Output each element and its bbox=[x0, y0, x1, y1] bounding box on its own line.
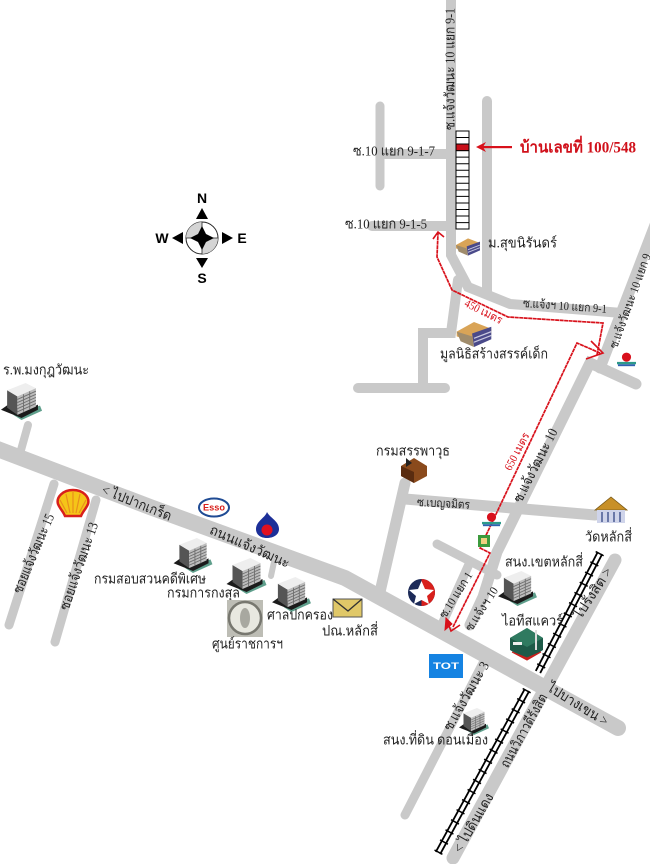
arrow to house bbox=[476, 142, 512, 152]
road label: Chaeng Watthana road: ถนนแจ้งวัฒนะ bbox=[207, 522, 292, 572]
place: hospital bbox=[1, 364, 89, 420]
icon: station south bbox=[482, 513, 501, 526]
main road: ถนนวิภาวดีรังสิต bbox=[453, 560, 615, 858]
railway north bbox=[536, 552, 602, 673]
icon: Esso bbox=[199, 498, 229, 516]
house row bbox=[456, 131, 469, 229]
road: soi 9-1-7 link bbox=[380, 149, 451, 159]
road: soi chaeng watthana 10 bbox=[470, 363, 636, 625]
place: consular dept: กรมการกงสุล bbox=[167, 586, 240, 602]
road label: soi 10 yaek 1: ซ.10 แยก 1 bbox=[436, 569, 475, 621]
road label: soi 13: ซอยแจ้งวัฒนะ 13 bbox=[57, 520, 102, 612]
place: land office: สนง.ที่ดิน ดอนเมือง bbox=[383, 730, 488, 748]
road label: soi 10: ซ.แจ้งวัฒนะ 10 bbox=[510, 426, 561, 505]
road label: to Pak Kret: < ไปปากเกร็ด bbox=[99, 480, 175, 525]
place: Suk Nirun village bbox=[456, 234, 557, 256]
road label: to Din Daeng: < ไปดินแดง bbox=[450, 790, 497, 856]
place: IT Square: ไอทีสแควร์ bbox=[501, 612, 563, 630]
label: 650 m: 650 เมตร bbox=[503, 431, 533, 473]
icon: PTT bbox=[256, 512, 279, 538]
place: IT Square bbox=[501, 612, 563, 660]
icon: station north bbox=[617, 353, 636, 366]
icon: convenience store bbox=[478, 535, 490, 547]
icon: Shell bbox=[58, 490, 88, 516]
road label: to Bang Khen: ไปบางเขน > bbox=[543, 678, 612, 730]
road: hospital link bbox=[21, 425, 28, 450]
road label: soi 10 yaek 9-1: ซ.แจ้งฯ 10 แยก 9-1 bbox=[523, 296, 607, 316]
place: ordnance department: กรมสรรพาวุธ bbox=[376, 444, 450, 460]
railway south bbox=[436, 689, 529, 854]
soi network north bbox=[451, 0, 622, 313]
icon: Esso: Esso bbox=[203, 502, 226, 512]
place: DSI bbox=[94, 538, 212, 588]
road label: Vibhavadi: ถนนวิภาวดีรังสิต bbox=[498, 691, 551, 771]
place: Lak Si district office: สนง.เขตหลักสี่ bbox=[505, 552, 583, 570]
road: right parallel soi bbox=[482, 101, 492, 292]
place: consular dept bbox=[167, 558, 266, 602]
place: hospital: ร.พ.มงกุฎวัฒนะ bbox=[3, 364, 89, 378]
place: government complex bbox=[212, 600, 283, 652]
place: admin court bbox=[267, 577, 333, 624]
compass: W bbox=[155, 230, 169, 246]
road label: 9-1-7: ซ.10 แยก 9-1-7 bbox=[353, 144, 435, 160]
icon: Caltex bbox=[408, 579, 435, 606]
road: soi benjamit bbox=[405, 499, 595, 515]
place: Wat Lak Si: วัดหลักสี่ bbox=[585, 528, 632, 546]
road: ordnance dept bbox=[380, 483, 405, 592]
place: children foundation bbox=[440, 322, 548, 362]
place: Wat Lak Si bbox=[585, 497, 632, 546]
road: soi 3 bbox=[405, 663, 483, 815]
road label: chaeng 10: ซ.แจ้งฯ 10 bbox=[462, 584, 501, 634]
road: foundation soi bbox=[423, 280, 458, 388]
road: soi 13 bbox=[55, 500, 96, 642]
icon: TOT bbox=[429, 654, 463, 678]
road: soi 10 yaek 9 bbox=[600, 225, 650, 368]
label: 450 m: 450 เมตร bbox=[462, 298, 504, 327]
place: post office bbox=[322, 599, 378, 640]
road: small stub bbox=[271, 562, 274, 576]
route 450 m bbox=[433, 232, 603, 355]
road label: soi 15: ซอยแจ้งวัฒนะ 15 bbox=[10, 511, 58, 596]
compass: S bbox=[197, 270, 207, 286]
place: government complex: ศูนย์ราชการฯ bbox=[212, 636, 283, 652]
place: Lak Si district office bbox=[498, 552, 583, 606]
icon: TOT: TOT bbox=[433, 661, 460, 671]
place: DSI: กรมสอบสวนคดีพิเศษ bbox=[94, 572, 206, 588]
place: ordnance department bbox=[376, 444, 450, 483]
road: soi 9-1-5 bbox=[372, 221, 451, 231]
road: soi 10 yaek 1 bbox=[443, 562, 470, 622]
road label: 9-1-5: ซ.10 แยก 9-1-5 bbox=[345, 218, 427, 232]
road: soi 10 yaek 1 cross bbox=[437, 544, 497, 575]
road label: to Rangsit: ไปรังสิต > bbox=[570, 564, 616, 623]
route 650 m bbox=[445, 341, 603, 631]
house number label: บ้านเลขที่ 100/548 bbox=[520, 136, 636, 156]
place: post office: ปณ.หลักสี่ bbox=[322, 622, 378, 640]
place: admin court: ศาลปกครอง bbox=[267, 608, 333, 624]
road: soi 15 bbox=[9, 484, 54, 625]
road label: soi 3: ซ.แจ้งวัฒนะ 3 bbox=[441, 659, 493, 734]
compass: N bbox=[197, 190, 207, 206]
compass bbox=[155, 190, 247, 286]
place: children foundation: มูลนิธิสร้างสรรค์เด็ก bbox=[440, 344, 548, 362]
road: left soi 9-1-7 bbox=[376, 106, 384, 186]
road: foundation cross soi bbox=[358, 383, 445, 393]
compass: E bbox=[237, 230, 247, 246]
place: land office bbox=[383, 708, 489, 748]
place: Suk Nirun village: ม.สุขนิรันดร์ bbox=[488, 234, 557, 252]
road label: benjamit: ซ.เบญจมิตร bbox=[417, 495, 471, 512]
main road: ถนนแจ้งวัฒนะ bbox=[0, 448, 618, 728]
